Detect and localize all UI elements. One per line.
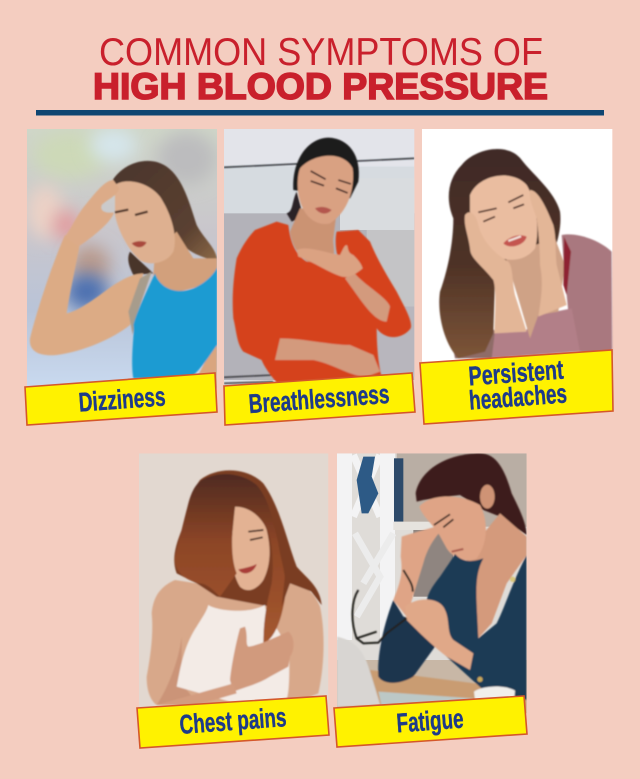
photo: persistent headaches	[422, 129, 612, 362]
label: Persistent headaches: Persistent	[468, 355, 564, 391]
forearm lower	[275, 338, 380, 377]
hand on chest	[297, 245, 363, 277]
label: Fatigue: Fatigue	[395, 704, 465, 738]
forearm upper	[345, 272, 390, 322]
label: Dizziness: Dizziness	[78, 381, 167, 418]
hair	[416, 453, 527, 535]
hair	[439, 149, 560, 358]
face	[298, 156, 353, 224]
right hair strands	[282, 580, 312, 604]
title	[93, 31, 548, 107]
face	[231, 506, 270, 590]
glasses	[352, 570, 413, 643]
hand	[65, 180, 119, 247]
desk	[370, 670, 527, 713]
sweater	[233, 222, 411, 382]
front hair	[175, 474, 286, 643]
label: Dizziness	[25, 373, 217, 425]
photo: breathlessness	[224, 129, 414, 389]
hair	[293, 138, 359, 198]
back hair	[173, 469, 322, 607]
sweater	[562, 234, 612, 355]
torso skin	[153, 232, 217, 295]
label: Fatigue	[334, 696, 527, 747]
label: Chest pains	[137, 696, 329, 748]
face	[470, 176, 537, 260]
title rule	[36, 110, 604, 116]
neck	[463, 513, 527, 640]
neck	[505, 238, 565, 338]
right hand and arm	[530, 190, 567, 317]
face	[115, 181, 175, 263]
hair	[112, 161, 217, 262]
label: Persistent headaches	[420, 350, 613, 424]
face	[419, 496, 486, 560]
neck and chest	[290, 208, 337, 265]
laptop	[337, 637, 380, 707]
label: Persistent headaches: headaches	[468, 378, 568, 416]
shoulder and raised arm	[30, 235, 143, 355]
strap	[128, 272, 152, 335]
photo: chest pains	[139, 453, 328, 713]
hand	[230, 627, 294, 692]
supporting hand and forearm	[393, 525, 442, 617]
title line 1: COMMON SYMPTOMS OF	[99, 31, 543, 74]
title line 2: HIGH BLOOD PRESSURE	[93, 66, 548, 107]
left hand and arm	[465, 212, 527, 333]
label: Chest pains: Chest pains	[179, 702, 287, 740]
label: Breathlessness	[224, 373, 415, 425]
blue top	[132, 268, 217, 378]
photo: dizziness	[27, 128, 217, 389]
front hand	[405, 600, 473, 670]
shoulders and arms	[147, 580, 324, 705]
label: Breathlessness: Breathlessness	[248, 379, 390, 419]
photo: fatigue	[337, 453, 527, 713]
shirt	[426, 554, 527, 700]
cup	[473, 685, 516, 698]
white top	[177, 605, 289, 702]
